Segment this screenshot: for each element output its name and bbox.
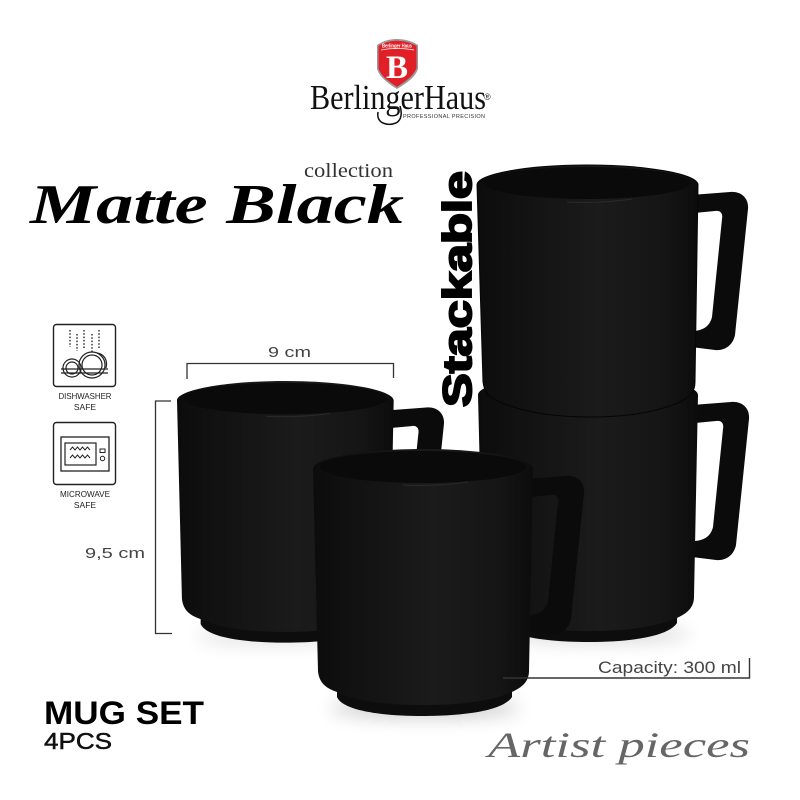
callout: capacity [503,658,750,678]
icon: red shield [377,39,418,89]
mug: stacked upper [477,165,748,417]
mug: back left [177,381,444,644]
registered mark: ® [484,92,491,102]
wordmark flourish [378,106,401,124]
title: Matte Black: Matte Black [29,174,404,236]
label: dishwasher: DISHWASHER [58,391,112,401]
dimension: width 9 cm: 9 cm [268,344,311,361]
icon: dishwasher safe [54,324,116,412]
callout: capacity: Capacity: 300 ml [598,658,741,677]
subheading: 4pcs: 4PCS [44,728,112,754]
tagline: PROFESSIONAL PRECISION [403,114,485,120]
label: safe: SAFE [74,500,96,510]
icon: red shield: Berlinger Haus [382,44,412,50]
logo: Berlinger Haus [310,39,491,124]
dimension: height 9,5 cm: 9,5 cm [85,545,145,562]
heading: mug set: MUG SET [44,695,204,731]
mug: stacked lower [478,375,749,643]
dimension: width 9 cm [187,344,394,379]
brand wordmark: BerlingerHaus [310,78,486,117]
label: Stackable: Stackable [436,171,480,407]
label: microwave: MICROWAVE [60,489,110,499]
icon: microwave safe [54,422,116,510]
tagline: artist pieces: Artist pieces [485,725,750,765]
collection label: collection [304,160,393,182]
dimension: height 9,5 cm [85,401,172,634]
icon: red shield: B [386,50,408,86]
label: safe: SAFE [74,402,96,412]
mug: front [313,449,584,718]
